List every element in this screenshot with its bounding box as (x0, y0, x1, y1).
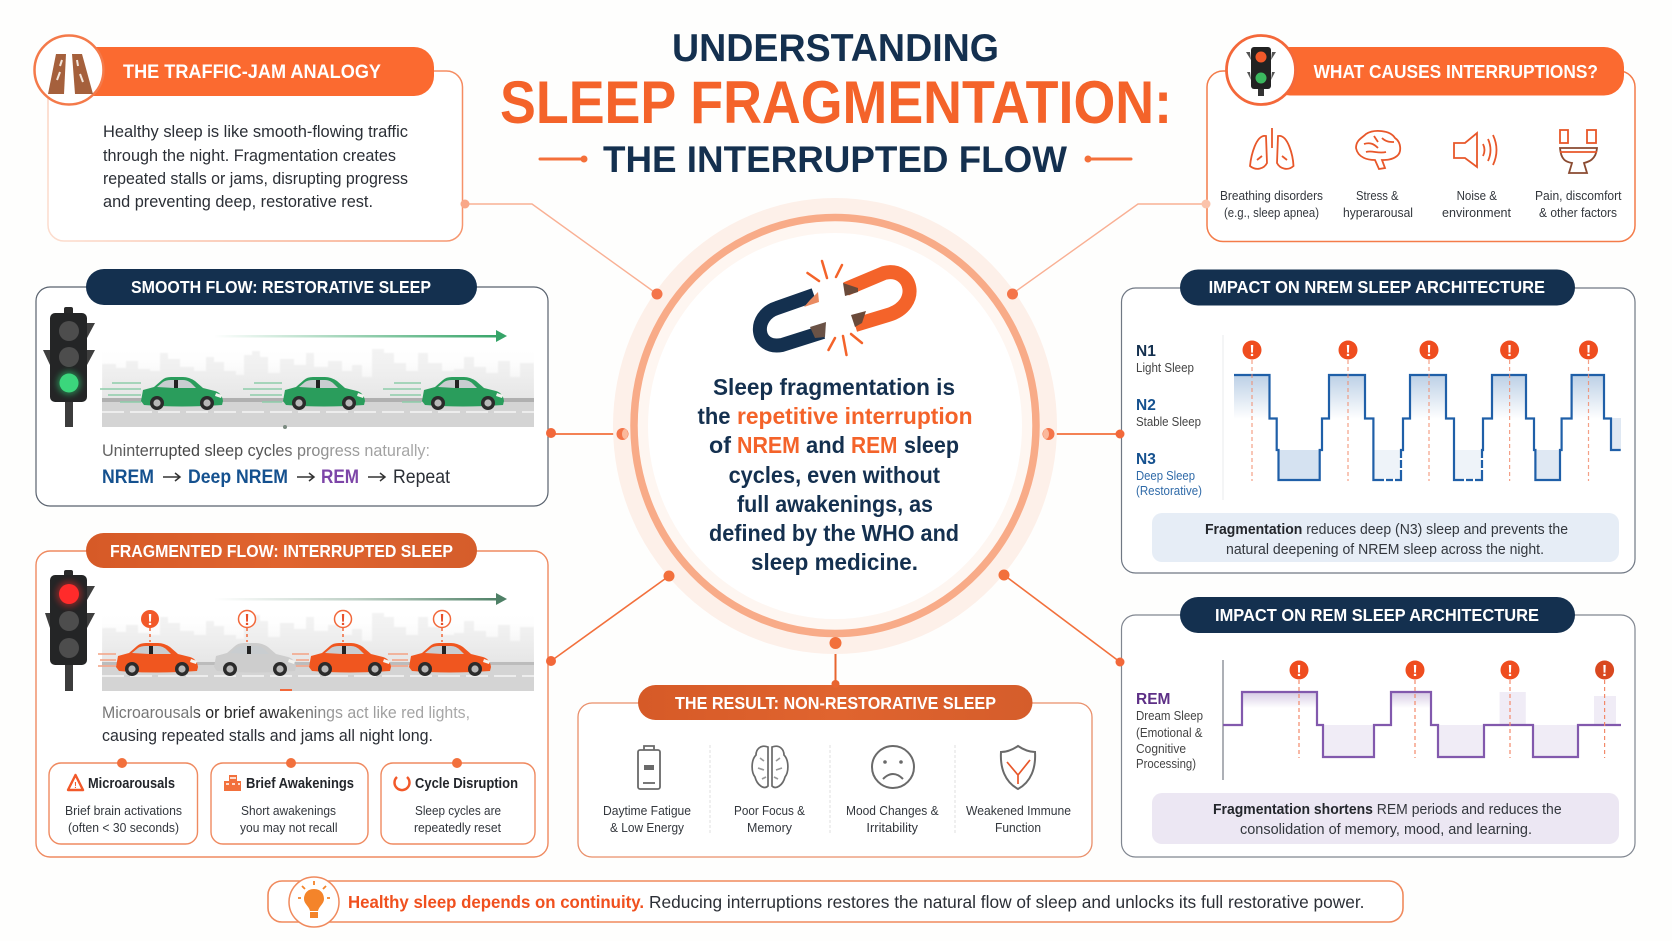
connector: NREM to hub (1048, 433, 1120, 435)
card outline (578, 703, 1092, 857)
body text: Healthy sleep is like smooth-flowing traffic (103, 123, 408, 141)
panel: NREM impact (1116, 270, 1635, 573)
definition text: of (709, 432, 731, 458)
card: microarousals (49, 758, 198, 844)
card outline (48, 71, 462, 241)
interruption markers (1290, 660, 1614, 680)
card: microarousals: (often < 30 seconds) (68, 820, 179, 835)
title ornament dot right (1084, 156, 1092, 162)
card: cycle disruption (381, 758, 535, 844)
hypnogram line (1223, 692, 1621, 757)
connector: analogy to hub (465, 204, 657, 294)
speed lines (98, 654, 408, 666)
cause labels: hyperarousal (1343, 205, 1413, 220)
alert markers: ! (244, 612, 250, 629)
header node (832, 680, 840, 688)
card: cycle disruption: Cycle Disruption (415, 776, 518, 792)
node: left highlight (622, 429, 628, 439)
icon: brain (752, 746, 788, 787)
icon: green traffic light (43, 307, 95, 427)
heading: THE TRAFFIC-JAM ANALOGY (123, 62, 381, 83)
plateau shading (1234, 375, 1604, 419)
header pill (1270, 47, 1624, 96)
heading: THE RESULT: NON-RESTORATIVE SLEEP (675, 693, 996, 713)
car 2 (283, 377, 365, 410)
icon: brain (1356, 131, 1400, 169)
caption (102, 703, 470, 745)
definition text: NREM (737, 432, 800, 458)
title line 2: SLEEP FRAGMENTATION: (500, 69, 1172, 136)
card: microarousals: Microarousals (88, 776, 175, 792)
car 1 (116, 643, 198, 676)
icon: traffic light (1226, 36, 1296, 104)
title ornament dot left (580, 156, 588, 162)
dashed gaps (1384, 458, 1482, 480)
hypnogram line (1234, 375, 1621, 480)
chart: REM hypnogram (1223, 660, 1621, 780)
icon: road (34, 36, 104, 104)
stage labels: Dream Sleep (1136, 708, 1203, 723)
header pill (1180, 597, 1575, 633)
alert markers: ! (147, 612, 153, 629)
note (1152, 793, 1619, 844)
central hub (613, 198, 1057, 654)
connector node (546, 656, 556, 666)
result labels: Function (995, 820, 1041, 835)
card outline (36, 551, 548, 857)
heading: SMOOTH FLOW: RESTORATIVE SLEEP (131, 277, 431, 297)
card outline (1207, 71, 1635, 242)
icon: shield (1001, 746, 1035, 789)
cause labels: (e.g., sleep apnea) (1224, 205, 1319, 220)
node: right highlight (1043, 429, 1049, 439)
card: cycle disruption: Sleep cycles are (415, 803, 501, 818)
cause labels: environment (1442, 205, 1511, 220)
card outline (36, 287, 548, 506)
note: Fragmentation reduces deep (N3) sleep and prevents the (1205, 522, 1568, 538)
result labels: Weakened Immune (966, 803, 1071, 818)
node: lower right (998, 570, 1010, 580)
definition text: Sleep fragmentation is (713, 374, 955, 400)
speed lines (100, 383, 421, 402)
heading: FRAGMENTED FLOW: INTERRUPTED SLEEP (110, 541, 453, 561)
node: upper left (652, 288, 662, 300)
card outline (1122, 615, 1635, 857)
note: consolidation of memory, mood, and learning. (1240, 822, 1532, 838)
icon: red traffic light (45, 570, 95, 691)
stage labels: N1 (1136, 343, 1156, 360)
connector node (1116, 430, 1124, 438)
node: right (1042, 428, 1054, 440)
panel: smooth flow (36, 269, 556, 506)
stage labels: N3 (1136, 451, 1156, 468)
connector node (460, 200, 470, 208)
card: brief awakenings: you may not recall (240, 820, 338, 835)
icon: speaker (1454, 133, 1496, 167)
note: Fragmentation shortens REM periods and reduces the (1213, 802, 1562, 818)
card: microarousals: ! (74, 781, 77, 790)
card: brief awakenings: Brief Awakenings (246, 776, 354, 792)
result labels (603, 803, 1071, 835)
trough shading (1323, 692, 1616, 757)
connector: causes to hub (1012, 204, 1206, 294)
card: brief awakenings (211, 758, 368, 844)
connector: smooth flow to hub (551, 433, 622, 435)
cause labels: Stress & (1356, 188, 1399, 203)
node: lower left (664, 570, 674, 582)
definition text: defined by the WHO and (709, 520, 959, 546)
cause labels: & other factors (1539, 205, 1617, 220)
body text: and preventing deep, restorative rest. (103, 193, 373, 211)
definition text: the (698, 403, 730, 429)
stage labels: Cognitive (1136, 741, 1186, 756)
arrow: forward flow (214, 330, 507, 342)
note (1152, 513, 1619, 562)
icon: battery (638, 746, 660, 789)
cause labels: Breathing disorders (1220, 188, 1323, 203)
car 3 (422, 377, 504, 410)
caption: Uninterrupted sleep cycles progress naturally: (102, 441, 430, 460)
outer halo (613, 198, 1057, 654)
illustration: road and skyline (102, 611, 534, 691)
header pill (70, 47, 434, 96)
trough shading (1278, 418, 1621, 480)
interruption markers: ! (1507, 663, 1513, 680)
header pill (86, 269, 477, 305)
connector node (546, 428, 556, 438)
card: cycle disruption: repeatedly reset (414, 820, 501, 835)
definition text: REM (851, 432, 898, 458)
note: natural deepening of NREM sleep across the night. (1226, 542, 1544, 558)
main ring (634, 218, 1036, 634)
connector: fragmented flow to hub (551, 576, 669, 661)
sleep cycle sequence: Repeat (393, 467, 451, 488)
icon: toilet (1560, 130, 1597, 173)
supporting message: Reducing interruptions restores the natural flow of sleep and unlocks its full restorative power. (649, 892, 1364, 912)
sleep cycle sequence (102, 467, 451, 488)
node: left (616, 428, 628, 440)
arrow: stalled flow (214, 593, 507, 605)
definition text: repetitive interruption (737, 403, 972, 429)
sleep cycle sequence: REM (321, 467, 359, 488)
connector node (1116, 658, 1124, 666)
stage labels: Stable Sleep (1136, 414, 1201, 429)
panel: what causes interruptions (1202, 36, 1635, 242)
result labels: Mood Changes & (846, 803, 939, 818)
interruption markers: ! (1426, 343, 1432, 360)
chart: NREM hypnogram (1223, 335, 1621, 500)
cause labels: Noise & (1457, 188, 1497, 203)
header pill (1180, 270, 1575, 306)
title ornament right (1087, 158, 1131, 160)
definition text: sleep medicine. (751, 549, 918, 575)
result labels: Poor Focus & (734, 803, 805, 818)
definition text: full awakenings, as (737, 491, 933, 517)
car 3 (309, 643, 391, 676)
car 2 grey (214, 643, 296, 676)
connector: result to hub (834, 643, 836, 685)
alert markers (141, 610, 450, 642)
stage labels: Light Sleep (1136, 360, 1194, 375)
title ornament left (540, 158, 585, 160)
key message: Healthy sleep depends on continuity. (348, 892, 644, 912)
stage labels: Processing) (1136, 756, 1196, 771)
interruption lines (1299, 680, 1605, 758)
caption: causing repeated stalls and jams all night long. (102, 726, 433, 745)
interruption markers: ! (1296, 663, 1302, 680)
stage labels: REM (1136, 691, 1170, 708)
icon: lungs (1250, 128, 1294, 169)
panel: fragmented flow (36, 533, 556, 857)
interruption markers (1242, 340, 1598, 360)
separators (710, 745, 955, 833)
heading: IMPACT ON REM SLEEP ARCHITECTURE (1215, 605, 1539, 625)
interruption markers: ! (1586, 343, 1591, 360)
card: brief awakenings: Short awakenings (241, 803, 336, 818)
body text (103, 123, 408, 211)
interruption markers: ! (1249, 343, 1255, 360)
car 1 (141, 377, 223, 410)
result labels: Daytime Fatigue (603, 803, 691, 818)
title line 1: UNDERSTANDING (672, 27, 999, 70)
title line 3: THE INTERRUPTED FLOW (603, 139, 1067, 180)
car 4 (409, 643, 491, 676)
panel: traffic-jam analogy (34, 36, 470, 241)
definition text: and (806, 432, 845, 458)
result labels: Memory (747, 820, 792, 835)
card outline (1122, 288, 1635, 573)
plateau shading (1242, 692, 1431, 708)
interruption markers: ! (1602, 663, 1607, 680)
body text: through the night. Fragmentation creates (103, 147, 396, 165)
header pill (86, 533, 477, 568)
heading: WHAT CAUSES INTERRUPTIONS? (1314, 61, 1598, 82)
interruption markers: ! (1345, 343, 1351, 360)
header pill (638, 685, 1032, 720)
alert markers: ! (439, 612, 445, 629)
stage labels: (Emotional & (1136, 725, 1203, 740)
icon: light bulb (289, 877, 339, 927)
illustration: road and skyline (102, 347, 534, 429)
caption: Microarousals or brief awakenings act like red lights, (102, 703, 470, 722)
node: bottom (830, 637, 842, 649)
definition text: sleep (904, 432, 959, 458)
result labels: & Low Energy (610, 820, 684, 835)
inner disc (648, 233, 1022, 619)
body text: repeated stalls or jams, disrupting progress (103, 170, 408, 188)
icon: sad face (872, 746, 914, 788)
panel: REM impact (1116, 597, 1635, 857)
result labels: Irritability (866, 820, 918, 835)
interruption markers: ! (1412, 663, 1418, 680)
connector node (1202, 200, 1210, 208)
node: upper right (1007, 288, 1018, 300)
alert markers: ! (340, 612, 346, 629)
sleep cycle sequence: Deep NREM (188, 467, 288, 488)
interruption markers: ! (1507, 343, 1512, 360)
stage labels (1136, 343, 1202, 498)
title (500, 27, 1172, 180)
card: microarousals: Brief brain activations (65, 803, 182, 818)
sleep cycle sequence: NREM (102, 467, 154, 488)
banner outline (268, 881, 1403, 922)
connector: REM to hub (1004, 575, 1120, 662)
cause labels: Pain, discomfort (1535, 188, 1622, 203)
stage labels: Deep Sleep (1136, 468, 1195, 483)
stage labels (1136, 691, 1203, 771)
definition text (698, 374, 972, 575)
heading: IMPACT ON NREM SLEEP ARCHITECTURE (1209, 277, 1545, 297)
cause labels (1220, 188, 1622, 220)
stage labels: N2 (1136, 397, 1156, 414)
stage labels: (Restorative) (1136, 483, 1202, 498)
panel: the result (578, 680, 1092, 857)
definition text: cycles, even without (729, 462, 940, 488)
footer banner (268, 877, 1403, 927)
interruption lines (1252, 360, 1588, 481)
icon: broken chain link (760, 261, 910, 355)
